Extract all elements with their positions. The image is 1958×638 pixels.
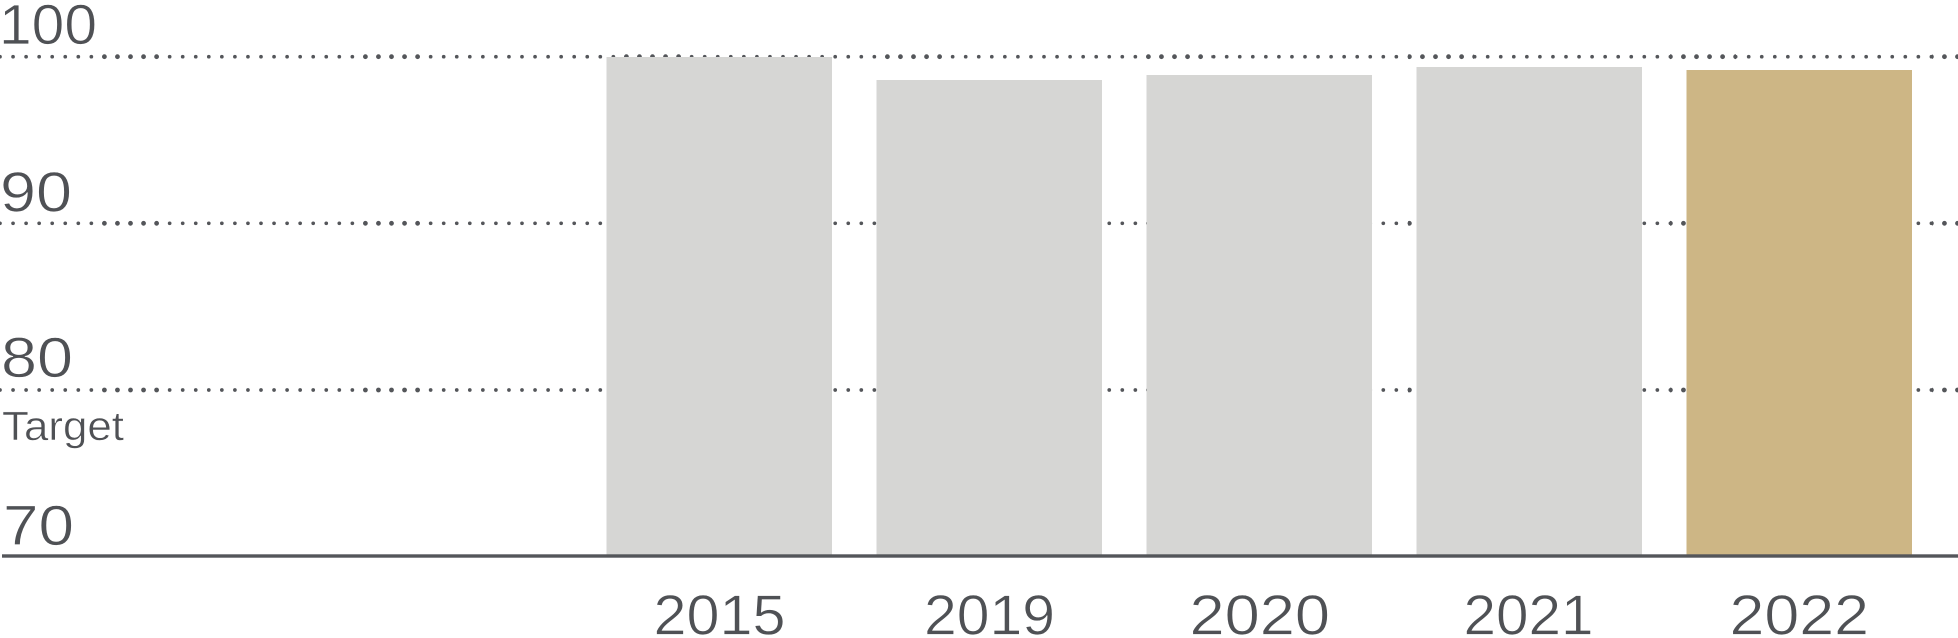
bar: 2015 bbox=[606, 57, 832, 555]
y-axis labels bbox=[0, 0, 97, 558]
y label: 70: 70 bbox=[3, 494, 74, 558]
x-axis labels bbox=[654, 584, 1869, 638]
target label: Target bbox=[2, 403, 125, 449]
bars bbox=[606, 57, 1912, 555]
bar: 2019 bbox=[876, 80, 1102, 555]
bar: 2020 bbox=[1146, 75, 1372, 555]
y label: 90: 90 bbox=[0, 160, 72, 224]
baseline axis bbox=[2, 554, 1958, 558]
bar: 2022 bbox=[1686, 70, 1912, 555]
y label: 80: 80 bbox=[1, 326, 73, 390]
bar: 2021 bbox=[1416, 67, 1642, 555]
